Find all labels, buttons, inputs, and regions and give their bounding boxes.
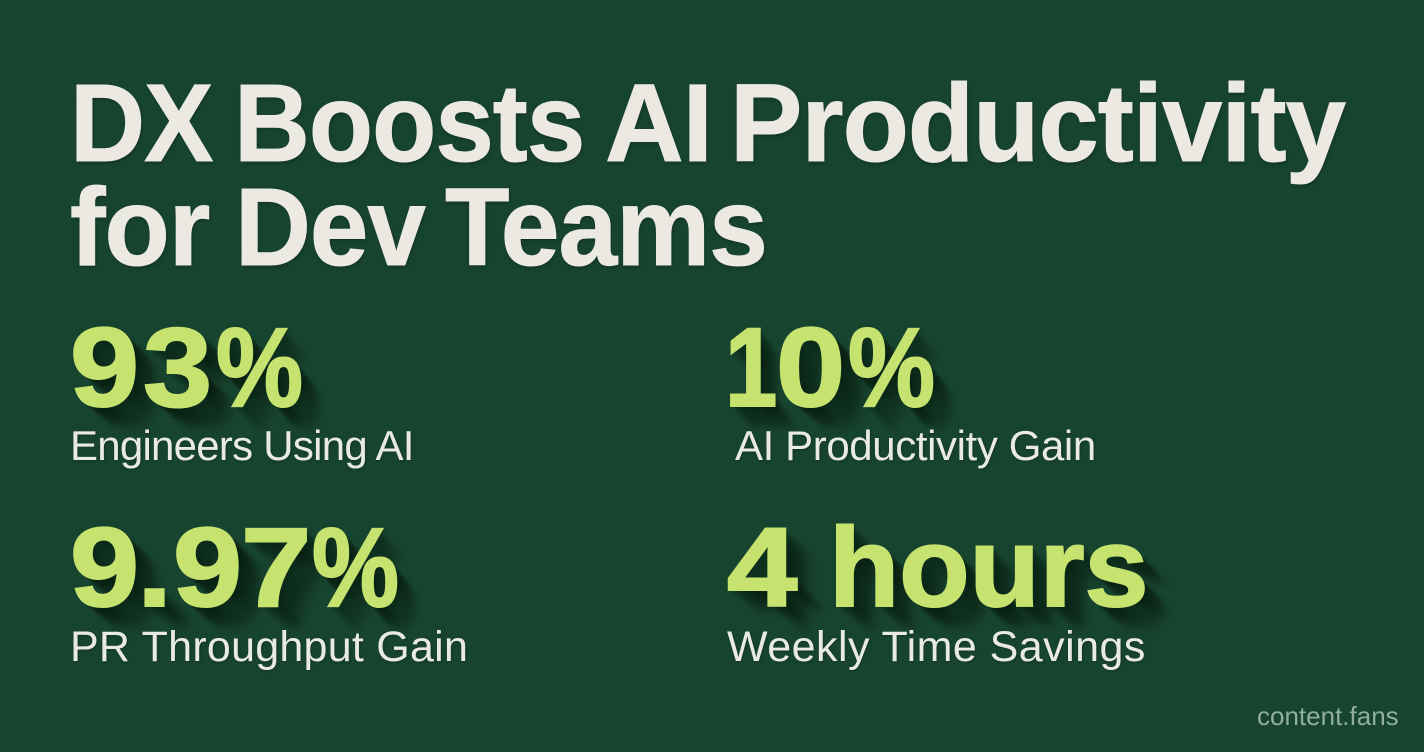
- value: 4 hours: hours: [829, 505, 1149, 630]
- stat: 10% AI productivity gain: [725, 305, 1096, 469]
- heading: main title: Boosts: [234, 62, 584, 185]
- value: 93%: %: [216, 305, 303, 430]
- heading: main title: DX: [70, 62, 213, 185]
- watermark: content.fans: [1257, 701, 1399, 731]
- value: 9.97%: 9: [70, 505, 139, 630]
- heading: main title: Teams: [445, 166, 767, 289]
- value: 10%: 0: [776, 305, 845, 430]
- label: AI productivity gain: AI Productivity Gain: [735, 422, 1096, 469]
- value: 9.97%: 9: [173, 505, 242, 630]
- value: 9.97%: %: [312, 505, 399, 630]
- value: 9.97%: [70, 505, 415, 630]
- heading: main title: AI: [605, 62, 712, 185]
- value: 93%: [70, 305, 319, 430]
- stat: 4 hours weekly time savings: [727, 505, 1166, 671]
- value: 9.97%: 7: [241, 505, 311, 630]
- value: 10%: 1: [725, 305, 777, 430]
- label: PR throughput gain: PR Throughput Gain: [70, 623, 468, 671]
- value: 9.97%: .: [137, 505, 172, 630]
- label: weekly time savings: Weekly Time Savings: [727, 623, 1146, 671]
- label: engineers using AI: Engineers Using AI: [70, 422, 414, 469]
- heading: main title: Dev: [235, 166, 425, 289]
- value: 4 hours: 4: [727, 505, 797, 630]
- stat: 9.97% PR throughput gain: [70, 505, 468, 671]
- value: 93%: 3: [143, 305, 212, 430]
- heading: main title: Productivity: [730, 62, 1345, 185]
- value: 10%: [725, 305, 951, 430]
- heading: main title: for: [70, 166, 209, 289]
- value: 93%: 9: [70, 305, 139, 430]
- stat: 93% engineers using AI: [70, 305, 414, 469]
- heading: main title: [70, 62, 1346, 289]
- value: 10%: %: [848, 305, 935, 430]
